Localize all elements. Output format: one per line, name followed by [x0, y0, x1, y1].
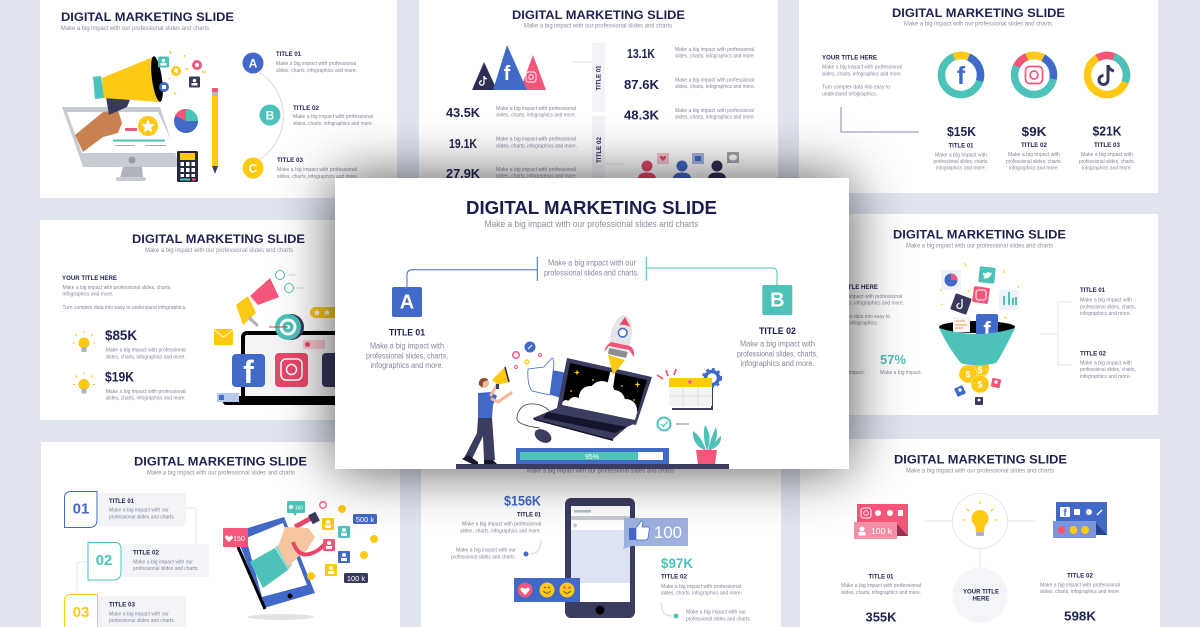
- text: title 01: infographics and more.: [370, 361, 444, 370]
- text block: your title here: YOUR TITLE HERE: [62, 275, 117, 282]
- stat: $21K: infographics and more.: [1082, 166, 1132, 172]
- stat: 57%: 57%: [880, 352, 906, 367]
- text block: your title here: Make a big impact with professional: [822, 64, 902, 70]
- icon: thumbs up: [528, 358, 567, 398]
- subtitle: Make a big impact with our professional slides and charts: [484, 219, 699, 229]
- pill: 500 k: 500 k: [356, 515, 374, 524]
- icon: light bulb 2: [73, 372, 95, 394]
- stat: 13.1K: slides, charts, infographics and more.: [675, 54, 755, 60]
- stat: 48.3K: Make a big impact with professional: [675, 108, 754, 114]
- illustration: tablet with magnet hand: [235, 512, 327, 620]
- text: title 01: slides, charts, infographics and more.: [276, 68, 357, 74]
- subtitle: Make a big impact with our professional slides and charts: [61, 25, 209, 32]
- text block: your title here: Turn complex data into easy to understand infographics.: [62, 305, 187, 311]
- step 02: Make a big impact with our: [133, 559, 193, 565]
- stat: $97K: slides, charts, infographics and more.: [661, 591, 742, 597]
- text block: your title here: [62, 275, 187, 311]
- step 01: 01: [73, 500, 89, 518]
- title: DIGITAL MARKETING SLIDE: [61, 10, 234, 24]
- badge: 150 likes: 150: [233, 536, 245, 543]
- vertical label: title 02: [592, 116, 605, 180]
- stat: 19.1K: slides, charts, infographics and more.: [496, 144, 577, 150]
- illustration: person with megaphone: [462, 367, 511, 464]
- illustration: funnel with coins: f: [983, 317, 991, 342]
- stat: 19.1K: 19.1K: [449, 136, 477, 151]
- chart: social triangles: f: [504, 63, 511, 85]
- text: title 01: Make a big impact with: [1080, 297, 1132, 303]
- text: title 03: Make a big impact with professional: [277, 167, 357, 173]
- stat: $9K: Make a big impact with: [1008, 152, 1060, 158]
- icons: people with reaction bubbles: [638, 152, 739, 179]
- illustration: funnel with coins: $: [965, 370, 971, 380]
- text: title 01: [366, 328, 448, 370]
- stat: 27.9K: slides, charts, infographics and more.: [496, 174, 577, 180]
- subtitle: Make a big impact with our professional slides and charts: [145, 247, 293, 254]
- text: title 03: slides, charts, infographics and more.: [277, 174, 358, 180]
- stat: 87.6K: 87.6K: [624, 77, 660, 92]
- text: title 01: professional slides, charts,: [1080, 304, 1136, 310]
- panel: top-left slide: [40, 0, 397, 198]
- stat: $21K: TITLE 03: [1094, 142, 1120, 149]
- badge C: [242, 158, 264, 178]
- badge: 160 likes: [287, 501, 305, 516]
- panel: top-right slide: [799, 0, 1158, 193]
- step 02: 02: [96, 552, 112, 569]
- text: title 02: Make a big impact with: [740, 340, 815, 349]
- text: title 01: infographics and more.: [1080, 311, 1131, 317]
- illustration: pencil: [212, 88, 218, 174]
- badge A: A: [400, 292, 414, 314]
- text block: your title here: Turn complex data into easy to: [823, 314, 890, 320]
- center note: professional slides and charts.: [544, 268, 639, 277]
- text: title 02: TITLE 02: [1067, 573, 1093, 580]
- chart: facebook donut: [935, 49, 987, 101]
- chart: tiktok donut: [1081, 49, 1133, 101]
- illustration: funnel with coins: $: [977, 380, 983, 390]
- text: title 01: [1080, 287, 1136, 317]
- step 01: [64, 492, 186, 528]
- card: facebook reactions: f: [1063, 508, 1067, 519]
- stat: $97K: TITLE 02: [661, 574, 687, 581]
- stat: $9K: professional slides, charts,: [1006, 159, 1062, 165]
- panel: middle-right slide: [823, 214, 1158, 415]
- panel: top-middle slide: [419, 0, 778, 181]
- stat: 57%: Make a big impact.: [823, 370, 865, 376]
- text block: your title here: slides, charts, infographics and more.: [822, 72, 902, 78]
- text: title 03: TITLE 03: [277, 157, 303, 164]
- stat: 19.1K: [449, 136, 577, 151]
- text: title 02: Make a big impact with: [1080, 360, 1132, 366]
- stat: 43.5K: Make a big impact with professional: [496, 106, 576, 112]
- badge B: [260, 104, 280, 126]
- illustration: laptop with rocket launch: [533, 358, 652, 441]
- badge B: B: [266, 108, 275, 122]
- subtitle: Make a big impact with our professional slides and charts: [906, 243, 1053, 250]
- stat: 27.9K: [446, 166, 577, 181]
- stat: $15K: infographics and more.: [936, 166, 986, 172]
- stat: $97K: Make a big impact with our: [686, 610, 746, 616]
- icon: light bulb circle: [952, 494, 1008, 548]
- chart: instagram donut: [1007, 48, 1061, 102]
- stat: $21K: $21K: [1092, 124, 1122, 139]
- stat: $85K: $85K: [105, 327, 137, 343]
- stat: 598K: 598K: [1064, 608, 1097, 623]
- text: title 01: Make a big impact with professional: [841, 583, 921, 589]
- badge B: [762, 285, 792, 315]
- callout marker left: [524, 540, 541, 556]
- text block: your title here: [822, 54, 902, 98]
- icons: social tiles above funnel: [940, 263, 1019, 405]
- title: DIGITAL MARKETING SLIDE: [893, 228, 1066, 242]
- step 01: professional slides and charts.: [109, 514, 175, 520]
- stat: $85K: [105, 327, 186, 360]
- title: DIGITAL MARKETING SLIDE: [892, 6, 1065, 20]
- vertical label: title 02: TITLE 02: [596, 137, 603, 163]
- illustration: megaphone and target: [236, 270, 343, 340]
- badge B: B: [770, 290, 785, 312]
- step 03: TITLE 03: [109, 602, 135, 609]
- subtitle: Make a big impact with our professional slides and charts: [906, 467, 1054, 474]
- text: title 02: [1040, 573, 1120, 595]
- stat: $156K: Make a big impact with professional: [462, 522, 541, 528]
- stat: 19.1K: Make a big impact with professional: [496, 136, 576, 142]
- stat: $156K: $156K: [504, 493, 541, 509]
- stat: $21K: professional slides, charts,: [1079, 159, 1135, 165]
- stat: $97K: [661, 555, 751, 622]
- stat: 27.9K: 27.9K: [446, 166, 481, 181]
- title: DIGITAL MARKETING SLIDE: [512, 8, 685, 22]
- panel: bottom-middle slide: [421, 468, 781, 627]
- illustration: smartphone: [565, 498, 635, 618]
- stat: 355K: 355K: [866, 609, 897, 624]
- stat: $15K: professional slides, charts,: [934, 159, 989, 165]
- step 02: TITLE 02: [133, 550, 159, 557]
- text: title 01: [841, 573, 921, 596]
- step 01: TITLE 01: [109, 498, 134, 505]
- text: title 02: slides, charts, infographics and more.: [1040, 589, 1120, 595]
- text: title 02: [293, 105, 373, 127]
- illustration: funnel with coins: [939, 314, 1015, 393]
- stat: $156K: slides, charts, infographics and more.: [460, 528, 541, 534]
- subtitle: Make a big impact with our professional slides and charts: [904, 21, 1052, 28]
- connector arc: [259, 72, 283, 160]
- stat: $15K: [934, 124, 989, 172]
- stat: $156K: TITLE 01: [517, 511, 541, 518]
- stat: $9K: infographics and more.: [1009, 166, 1059, 172]
- stat: $9K: $9K: [1022, 124, 1047, 139]
- illustration: mouse and cable: [517, 404, 554, 446]
- text: title 02: TITLE 02: [293, 105, 319, 112]
- stat: $85K: slides, charts, infographics and more.: [106, 354, 186, 360]
- connector: blue: [407, 257, 537, 287]
- pill: 100 k: 100 k: [347, 574, 365, 583]
- stat: $97K: $97K: [661, 555, 693, 571]
- stat: $9K: TITLE 02: [1021, 142, 1047, 149]
- chart: pie: [174, 109, 198, 133]
- stat: 13.1K: Make a big impact with professional: [675, 47, 754, 53]
- text: title 02: [1080, 350, 1136, 380]
- stat: 43.5K: 43.5K: [446, 105, 481, 120]
- step 03: Make a big impact with our: [109, 611, 169, 617]
- icons: social bubbles: [158, 51, 206, 94]
- step 03: professional slides and charts.: [109, 618, 175, 624]
- stat: $15K: $15K: [947, 124, 977, 139]
- icons: reaction bubbles: [513, 342, 542, 368]
- illustration: laptop with social tiles: [214, 329, 343, 405]
- stat: $19K: [105, 368, 186, 402]
- text: title 01: Make a big impact with: [370, 342, 444, 351]
- subtitle: Make a big impact with our professional slides and charts: [147, 469, 295, 476]
- stat: $97K: Make a big impact with professional: [661, 584, 741, 590]
- text block: your title here: Make a big impact with professional: [823, 294, 902, 300]
- step 02: [88, 542, 209, 580]
- text: title 02: Make a big impact with professional: [1040, 582, 1120, 588]
- title: DIGITAL MARKETING SLIDE: [132, 232, 305, 246]
- text: title 01: slides, charts, infographics and more.: [841, 590, 921, 596]
- text block: your title here: [823, 284, 904, 327]
- text: title 01: professional slides, charts,: [366, 351, 448, 360]
- stat: $9K: [1006, 124, 1062, 172]
- stat: $156K: professional slides and charts.: [451, 554, 516, 560]
- text block: your title here: Turn complex data into easy to: [822, 84, 890, 90]
- badge: 150 likes: [223, 528, 248, 547]
- center note: [544, 259, 639, 277]
- subtitle: Make a big impact with our professional slides and charts: [524, 22, 672, 30]
- illustration: funnel with coins: $: [977, 365, 983, 375]
- badge C: C: [249, 162, 258, 176]
- text block: your title here: YOUR TITLE HERE: [823, 284, 878, 291]
- stat: 43.5K: [446, 105, 576, 120]
- title: DIGITAL MARKETING SLIDE: [134, 454, 307, 468]
- step 01: Make a big impact with our: [109, 508, 169, 514]
- badge A: [392, 287, 422, 317]
- text block: your title here: Make a big impact with professional slides, charts,: [62, 285, 172, 291]
- stat: $15K: Make a big impact with: [935, 152, 987, 158]
- illustration: monitor with hand and megaphone: [62, 56, 180, 181]
- text block: your title here: YOUR TITLE HERE: [822, 54, 877, 62]
- chart: facebook donut: f: [957, 62, 966, 90]
- stat: $156K: Make a big impact with our: [456, 548, 516, 554]
- icon: target check: [658, 418, 689, 430]
- card: facebook reactions: [1053, 502, 1107, 538]
- stat: 43.5K: slides, charts, infographics and more.: [496, 112, 576, 118]
- chart: progress bar 95%: 95%: [585, 454, 599, 461]
- callout marker right: [661, 602, 678, 618]
- stat: 87.6K: slides, charts, infographics and more.: [675, 84, 755, 90]
- badge A: [242, 52, 264, 74]
- badge A: A: [249, 56, 258, 70]
- text: title 02: infographics and more.: [1080, 374, 1131, 380]
- badge: 100 likes: [623, 518, 688, 549]
- text: title 03: [277, 157, 358, 180]
- vertical label: title 01: [592, 43, 605, 112]
- stat: 48.3K: slides, charts, infographics and more.: [675, 114, 755, 120]
- illustration: calculator: [177, 151, 198, 182]
- text block: your title here: understand infographics.: [823, 321, 878, 327]
- chart: social triangles: [472, 45, 546, 90]
- stat: 48.3K: [624, 108, 755, 122]
- panel: middle-left slide: [40, 220, 343, 420]
- connector: teal: [646, 257, 777, 285]
- text: title 02: professional slides, charts,: [1080, 367, 1136, 373]
- title: DIGITAL MARKETING SLIDE: [894, 452, 1067, 466]
- text: title 02: TITLE 02: [1080, 350, 1106, 357]
- stat: 13.1K: 13.1K: [627, 46, 655, 61]
- text: title 02: professional slides, charts,: [737, 349, 818, 358]
- stat: $19K: $19K: [105, 368, 134, 384]
- card: instagram 100 k: 100 k: [871, 527, 893, 536]
- panel: bottom-right slide: [800, 439, 1160, 627]
- vertical label: title 01: TITLE 01: [595, 65, 602, 90]
- center note: Make a big impact with our: [548, 259, 636, 268]
- text block: your title here: slides, charts, infographics and more.: [823, 301, 904, 307]
- text: title 02: TITLE 02: [759, 326, 796, 337]
- badge: 160 likes: 160: [295, 506, 303, 512]
- icons: audience tiles: [307, 502, 378, 580]
- text block: your title here: infographics and more.: [62, 292, 114, 298]
- subtitle: Make a big impact with our professional slides and charts: [527, 468, 674, 475]
- step 03: 03: [73, 604, 89, 621]
- stat: 87.6K: Make a big impact with professional: [675, 78, 754, 84]
- ground line: [456, 464, 729, 469]
- icon: light bulb 1: [73, 331, 95, 352]
- text: title 01: Make a big impact with professional: [276, 61, 356, 67]
- stat: 27.9K: Make a big impact with professional: [496, 167, 576, 173]
- illustration: laptop with social tiles: f: [243, 354, 254, 390]
- text: title 02: infographics and more.: [740, 359, 814, 368]
- center badge: your title here: [952, 568, 1008, 622]
- stat: $97K: professional slides and charts.: [686, 616, 751, 622]
- text: title 02: [737, 326, 818, 368]
- stat: $15K: TITLE 01: [948, 142, 974, 149]
- card: instagram 100 k: [854, 504, 908, 539]
- stat: $156K: [451, 493, 541, 560]
- text: title 02: Make a big impact with professional: [293, 114, 373, 120]
- text block: your title here: understand infographics.: [822, 92, 877, 98]
- stat: $85K: Make a big impact with professional: [106, 348, 186, 354]
- illustration: potted plant: [693, 425, 721, 464]
- text: title 02: slides, charts, infographics and more.: [293, 121, 373, 127]
- stat: $21K: [1079, 124, 1135, 172]
- panel: bottom-left slide: [41, 442, 400, 627]
- text: title 01: TITLE 01: [276, 51, 301, 58]
- badge: reactions bar: [514, 578, 580, 602]
- stat: 87.6K: [624, 77, 755, 92]
- panel: center featured slide: [335, 178, 849, 469]
- stat: 57%: Make a big impact.: [880, 370, 922, 376]
- center badge: your title here: HERE: [972, 595, 990, 602]
- illustration: calendar with gear: [657, 369, 721, 409]
- stat: $19K: Make a big impact with professional: [106, 389, 186, 395]
- pill: 500 k: [353, 514, 377, 524]
- title: DIGITAL MARKETING SLIDE: [466, 197, 717, 218]
- stat: 48.3K: 48.3K: [624, 108, 660, 122]
- stat: 57%: [823, 352, 922, 376]
- text: title 01: TITLE 01: [868, 573, 894, 580]
- step 03: [64, 594, 186, 627]
- pill: 100 k: [344, 573, 368, 583]
- chart: progress bar 95%: [516, 448, 669, 464]
- stat: $19K: slides, charts, infographics and more.: [106, 396, 186, 402]
- stat: $21K: Make a big impact with: [1081, 152, 1133, 158]
- illustration: rocket: [604, 313, 636, 375]
- text: title 01: TITLE 01: [389, 328, 426, 339]
- step 02: professional slides and charts.: [133, 566, 199, 572]
- badge: 100 likes: 100: [654, 523, 682, 542]
- stat: 13.1K: [627, 46, 755, 61]
- text: title 01: TITLE 01: [1080, 287, 1105, 294]
- text: title 01: [276, 51, 357, 74]
- center badge: your title here: YOUR TITLE: [963, 588, 999, 595]
